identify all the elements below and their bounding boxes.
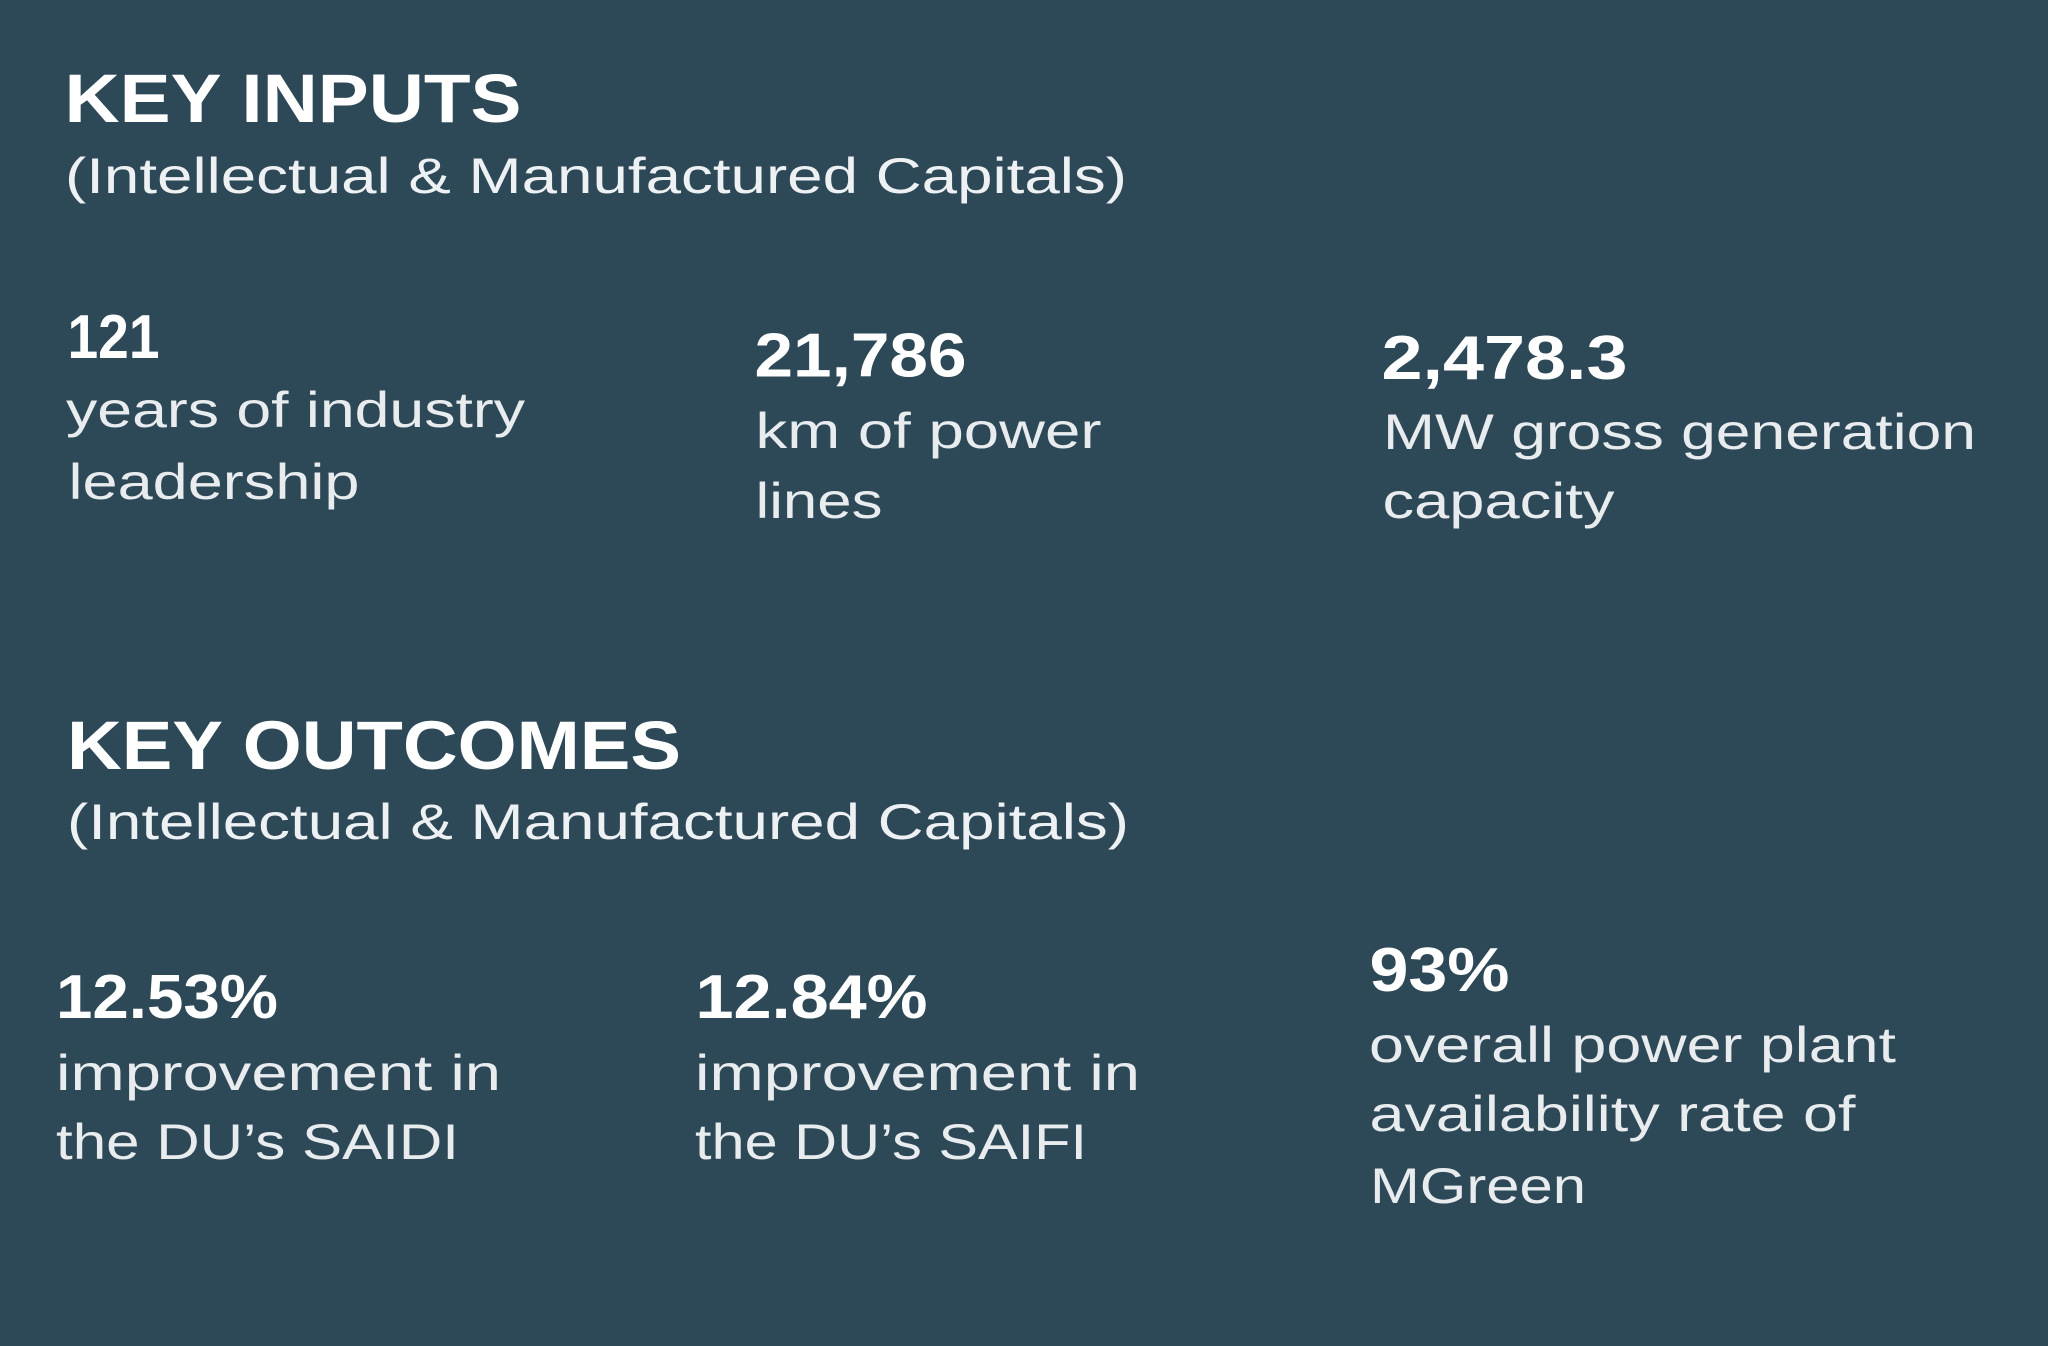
stat: 2,478.3 MW gross generation capacity: capacity xyxy=(1382,473,1614,529)
stat: 12.84% improvement in SAIFI: 12.84% xyxy=(696,963,928,1032)
stat: 21,786 km of power lines: km of power xyxy=(756,403,1102,459)
stat: 93% overall power plant availability xyxy=(1369,936,1896,1214)
stat: 12.84% improvement in SAIFI: the DU’s SAIFI xyxy=(695,1114,1087,1170)
stat: 12.53% improvement in SAIDI: 12.53% xyxy=(56,963,278,1032)
stat: 12.53% improvement in SAIDI xyxy=(56,963,501,1170)
stat: 2,478.3 MW gross generation capacity xyxy=(1382,324,1976,529)
stat: 93% overall power plant availability: MGreen xyxy=(1370,1158,1586,1214)
stat: 121 years of industry leadership: years of industry xyxy=(66,382,525,438)
stat: 12.84% improvement in SAIFI: improvement in xyxy=(695,1045,1140,1101)
stat: 21,786 km of power lines: 21,786 xyxy=(754,322,966,390)
stat: 93% overall power plant availability: 93% xyxy=(1370,936,1510,1005)
stat: 21,786 km of power lines xyxy=(754,322,1102,529)
stat: 121 years of industry leadership: 121 xyxy=(68,303,160,372)
stat: 2,478.3 MW gross generation capacity: MW gross generation xyxy=(1383,404,1976,460)
stat: 93% overall power plant availability: availability rate of xyxy=(1370,1086,1856,1142)
panel: key inputs xyxy=(64,60,1976,529)
stat: 21,786 km of power lines: lines xyxy=(756,473,882,529)
stat: 12.84% improvement in SAIFI xyxy=(695,963,1140,1170)
heading: key outcomes: KEY OUTCOMES xyxy=(67,707,681,784)
stat: 121 years of industry leadership xyxy=(66,303,525,510)
subheading: key outcomes capitals: (Intellectual & Manufactured Capitals) xyxy=(67,794,1129,850)
stat: 2,478.3 MW gross generation capacity: 2,478.3 xyxy=(1382,324,1628,393)
heading: key inputs: KEY INPUTS xyxy=(64,60,522,137)
panel: key outcomes xyxy=(56,707,1896,1214)
stat: 121 years of industry leadership: leadership xyxy=(68,454,360,510)
stat: 93% overall power plant availability: overall power plant xyxy=(1369,1017,1896,1073)
stat: 12.53% improvement in SAIDI: the DU’s SAIDI xyxy=(56,1114,459,1170)
subheading: key inputs capitals: (Intellectual & Manufactured Capitals) xyxy=(65,148,1127,204)
stat: 12.53% improvement in SAIDI: improvement in xyxy=(56,1045,501,1101)
